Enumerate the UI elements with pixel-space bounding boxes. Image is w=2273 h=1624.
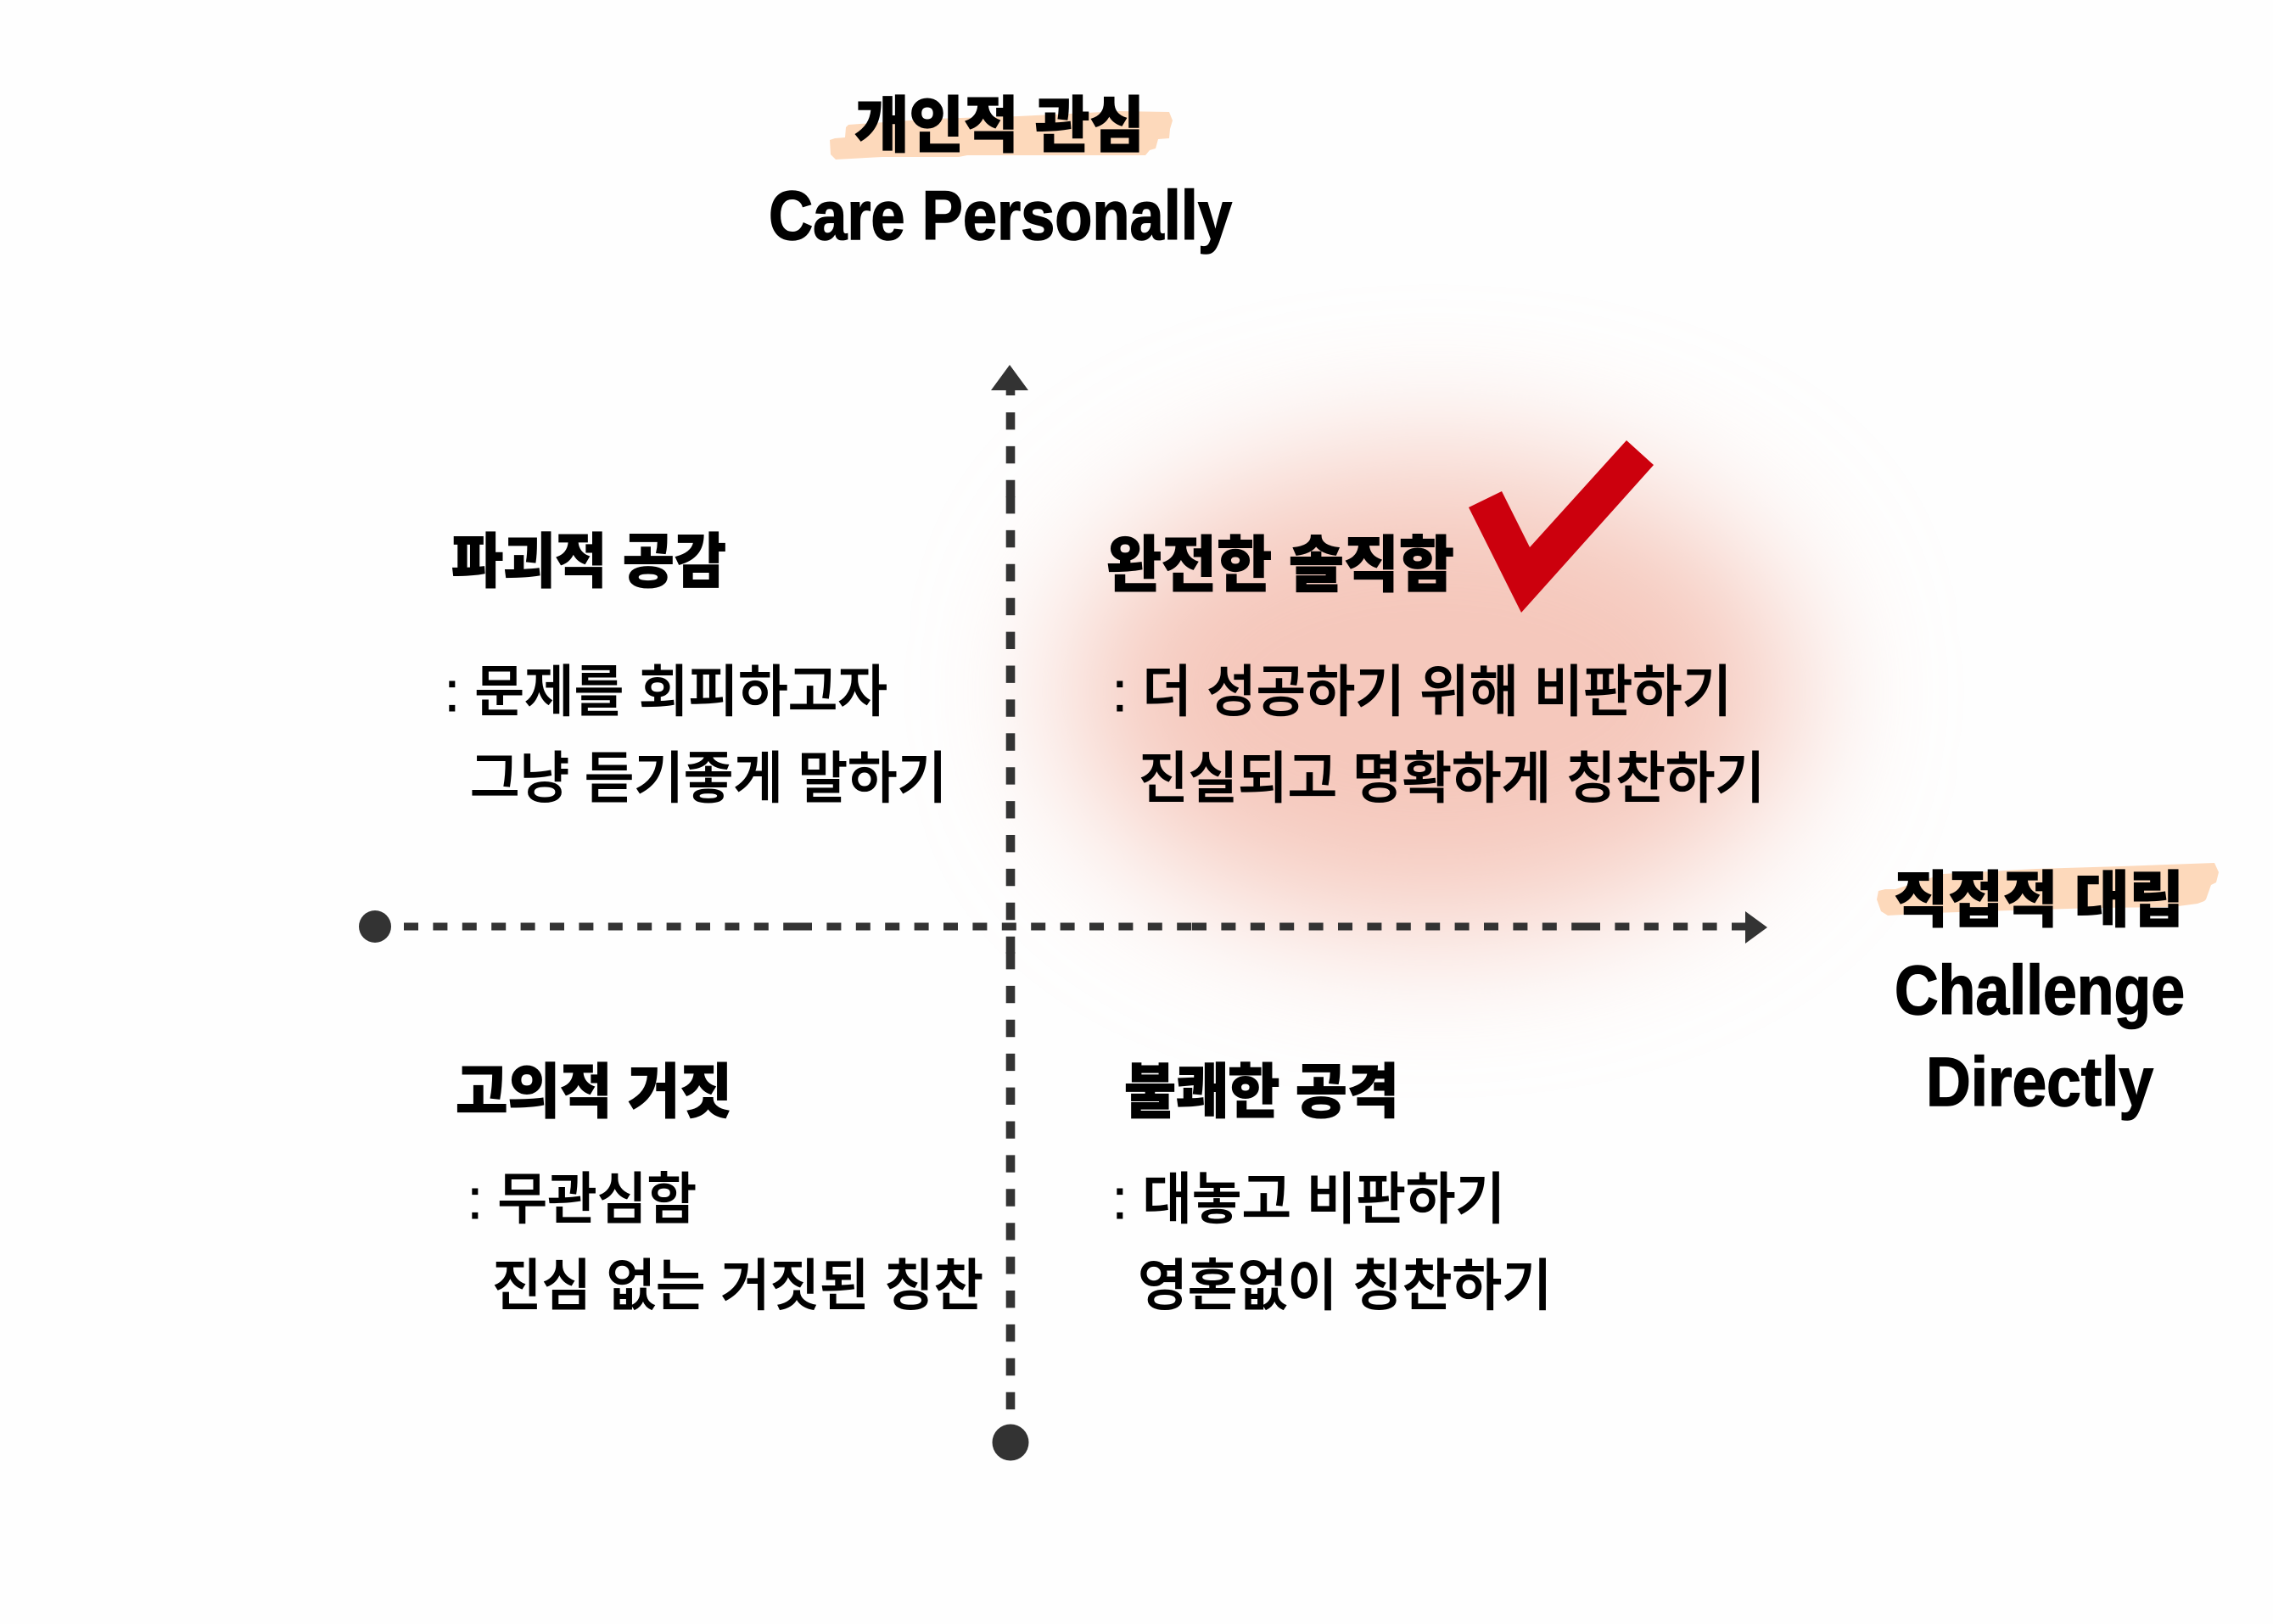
axis label: challenge directly	[1877, 863, 2219, 1121]
english title: directly: Directly	[1926, 1044, 2153, 1121]
description line 1: : 대놓고 비판하기	[1112, 1168, 1505, 1230]
brush highlight: care	[830, 111, 1173, 160]
description line 2: 진심 없는 거짓된 칭찬	[492, 1254, 983, 1317]
english title: care: Care Personally	[769, 177, 1232, 255]
horizontal axis arrow	[359, 910, 1767, 944]
english title: challenge: Challenge	[1895, 952, 2185, 1029]
description line 2: 진실되고 명확하게 칭찬하기	[1139, 747, 1765, 809]
description line 1: : 무관심함	[467, 1168, 697, 1230]
quadrant: manipulative insincerity	[456, 1059, 983, 1317]
vertical axis arrow	[991, 365, 1028, 1461]
korean title: care: 개인적 관심	[854, 92, 1145, 160]
axis label: care personally	[769, 92, 1232, 255]
korean title: challenge: 직접적 대립	[1894, 867, 2184, 935]
heading: 고의적 거짓	[456, 1059, 732, 1125]
quadrant: radical candor	[1106, 440, 1765, 809]
brush highlight: challenge	[1877, 863, 2219, 916]
heading: 완전한 솔직함	[1106, 532, 1454, 600]
icon: red check mark	[1469, 440, 1654, 613]
quadrant: obnoxious aggression	[1112, 1059, 1552, 1317]
description line 1: : 문제를 회피하고자	[445, 660, 887, 723]
description line 2: 영혼없이 칭찬하기	[1138, 1254, 1552, 1317]
description line 2: 그냥 듣기좋게 말하기	[470, 747, 947, 809]
heading: 파괴적 공감	[451, 529, 726, 595]
description line 1: : 더 성공하기 위해 비판하기	[1112, 660, 1732, 723]
red glow behind top-right quadrant	[1069, 454, 1799, 929]
heading: 불쾌한 공격	[1124, 1059, 1399, 1125]
quadrant: ruinous empathy	[445, 529, 947, 809]
